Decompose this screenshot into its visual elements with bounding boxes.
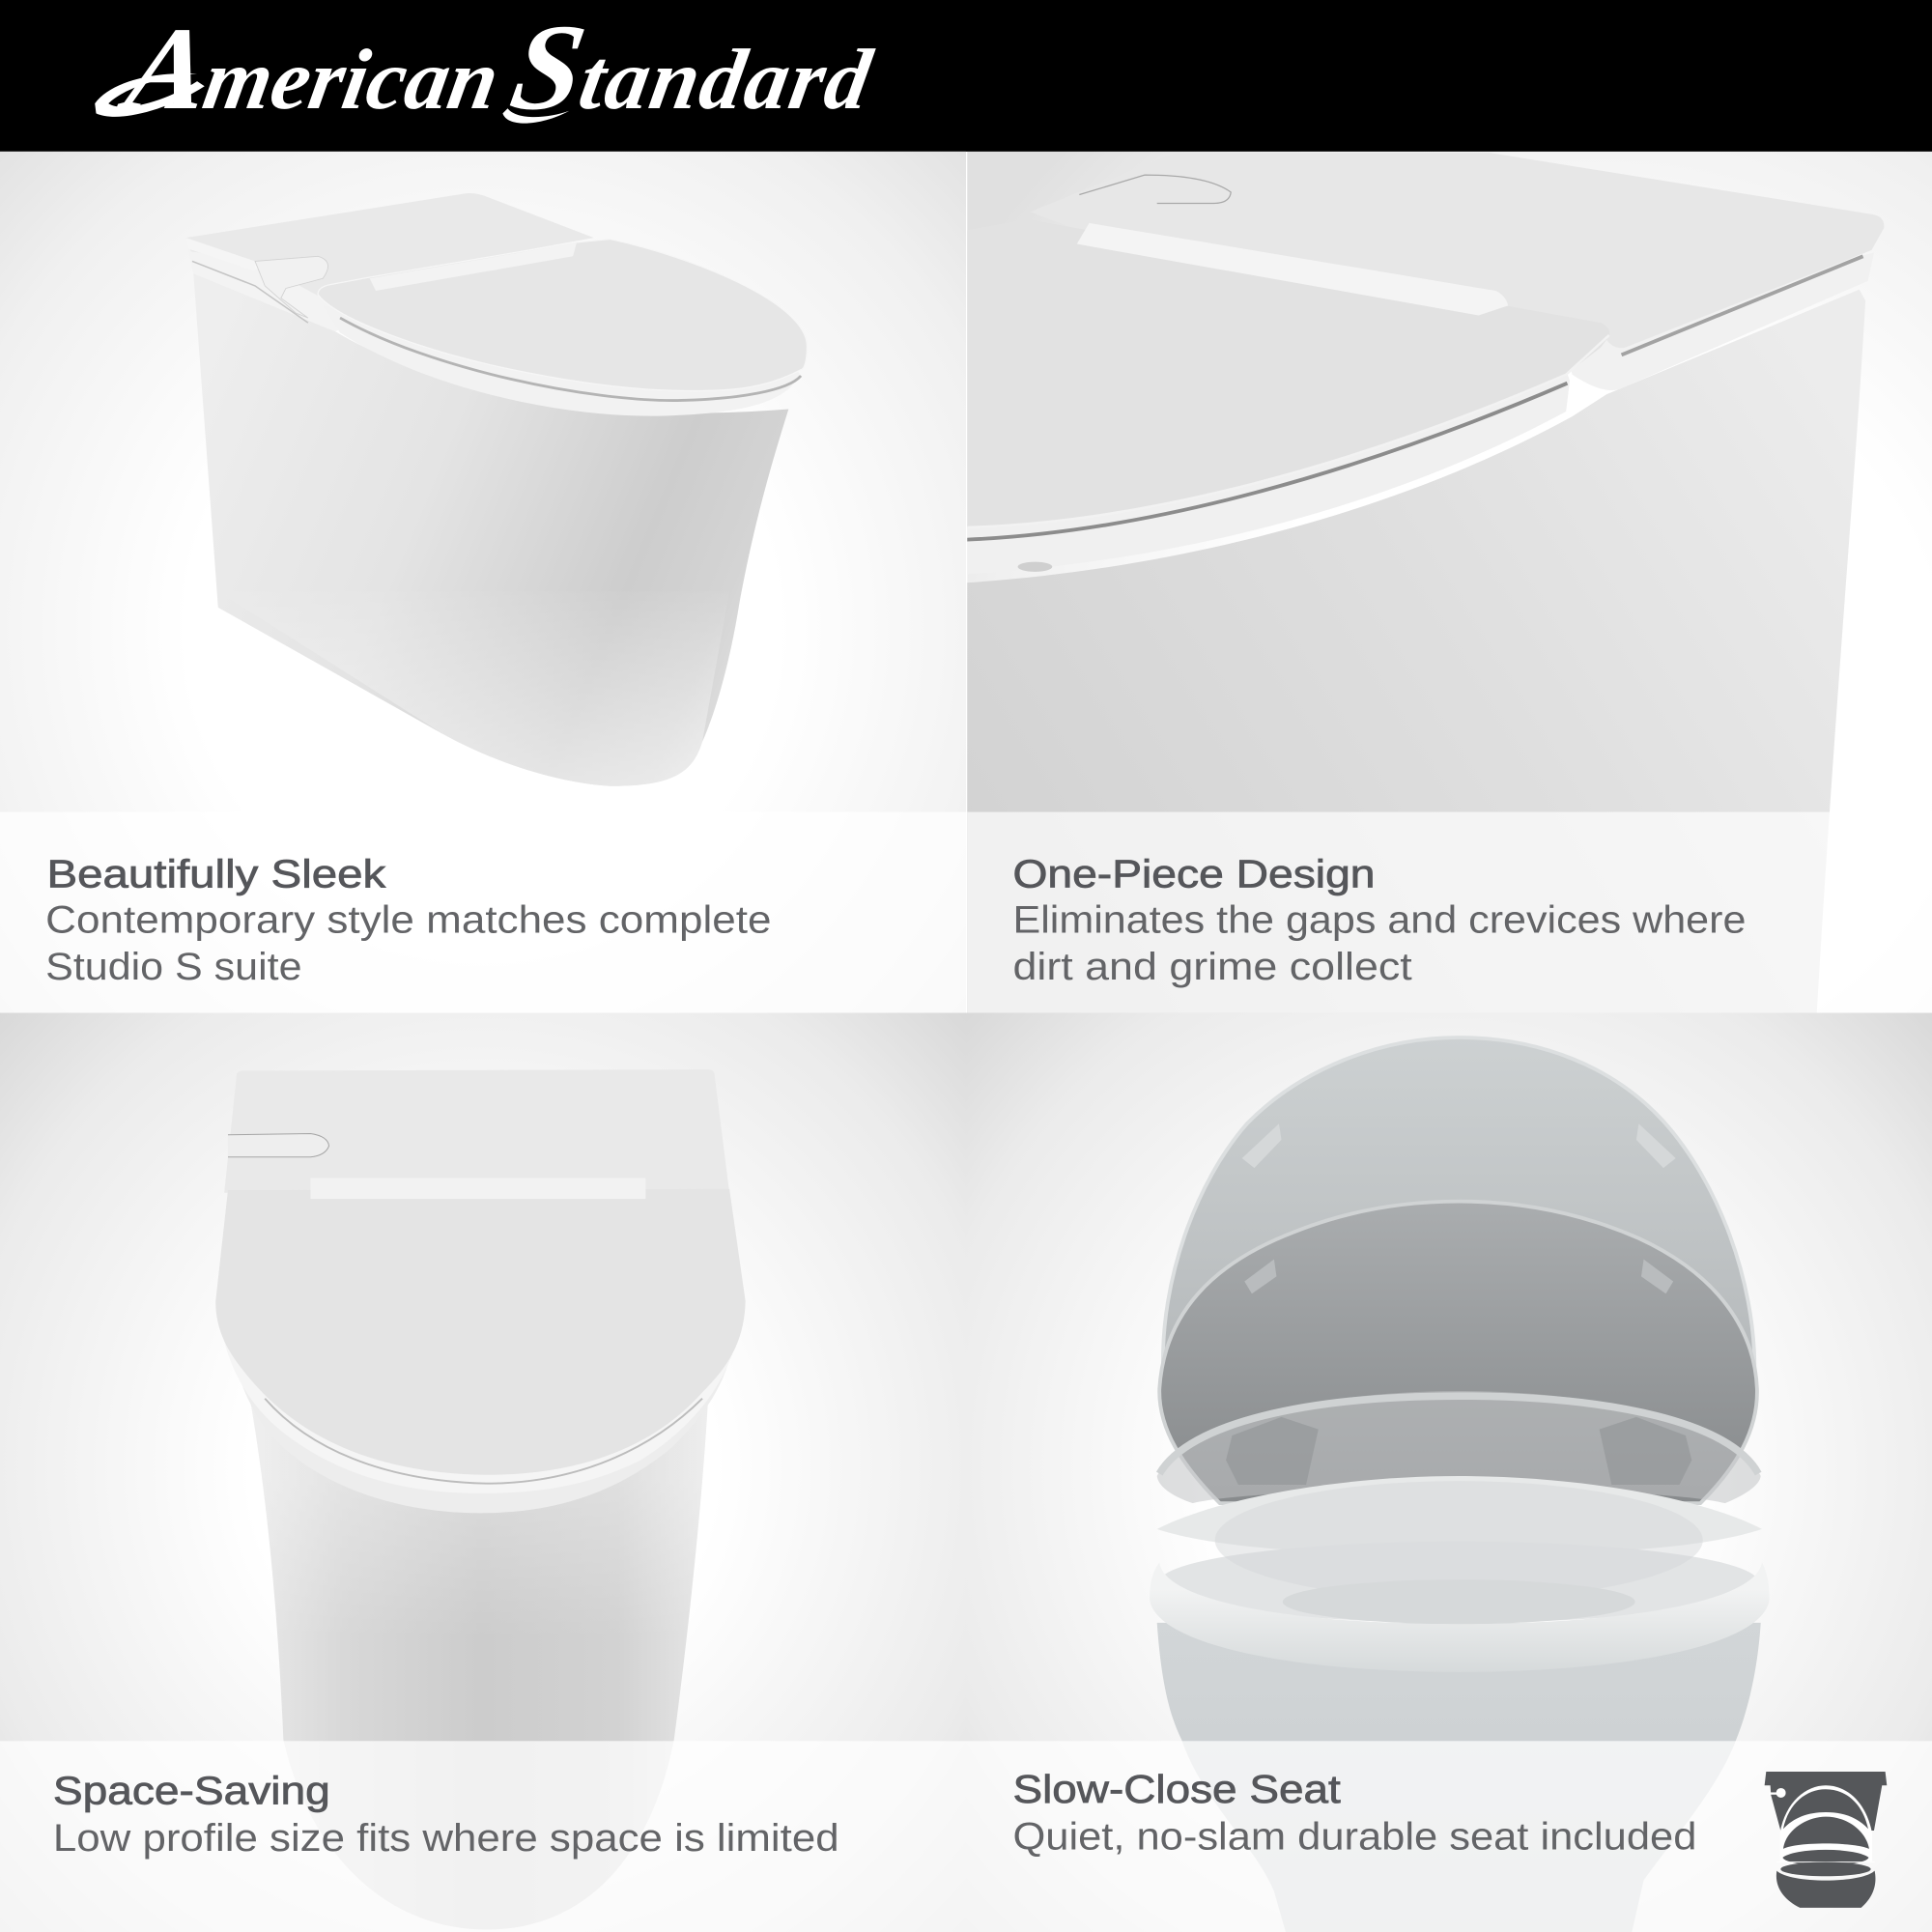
toilet with seat motion xyxy=(1150,1037,1770,1932)
lowering lid xyxy=(1157,1391,1761,1503)
seat xyxy=(1165,1549,1754,1621)
bowl xyxy=(1157,1623,1761,1932)
caption text: Low profile size fits where space is limited xyxy=(53,1817,839,1860)
panel: Slow-Close Seat xyxy=(966,1012,1932,1932)
hinge bar xyxy=(310,1178,645,1199)
caption overlay xyxy=(966,1741,1932,1932)
caption overlay xyxy=(968,811,1830,1012)
seat lower layer xyxy=(1155,375,1570,551)
rim xyxy=(1150,1562,1770,1672)
caption text: Studio S suite xyxy=(45,946,301,988)
hinge bar xyxy=(1077,223,1508,316)
open lid xyxy=(1163,1037,1754,1368)
panel: Space-Saving xyxy=(0,1012,966,1932)
icon: slow-close toilet seat xyxy=(1765,1772,1887,1908)
header band with logo xyxy=(0,0,1932,152)
tank lid xyxy=(1179,153,1884,348)
translucent seat overlap xyxy=(1215,1482,1702,1557)
panel: Beautifully Sleek xyxy=(0,152,966,1012)
caption text: Quiet, no-slam durable seat included xyxy=(1012,1816,1696,1859)
caption text: dirt and grime collect xyxy=(1012,946,1412,988)
caption overlay xyxy=(0,1741,966,1932)
caption text xyxy=(1012,851,1746,988)
toilet top view xyxy=(215,1069,746,1929)
seat lid xyxy=(967,249,1605,526)
seat lid xyxy=(318,239,807,391)
flush button xyxy=(228,1133,329,1157)
lowering lid ribs xyxy=(1226,1417,1691,1485)
logo: American Standard: S xyxy=(502,0,595,135)
tank lid xyxy=(186,193,594,296)
seat opening xyxy=(1283,1588,1634,1623)
caption text: Beautifully Sleek xyxy=(46,851,386,895)
caption text: One-Piece Design xyxy=(1012,851,1375,895)
seat bumper xyxy=(1018,562,1052,572)
caption overlay xyxy=(0,812,966,1012)
logo: American Standard: merican xyxy=(197,33,506,128)
caption text: Slow-Close Seat xyxy=(1012,1767,1341,1811)
tank lower layer xyxy=(1571,282,1824,390)
logo: American Standard xyxy=(95,0,886,135)
logo: American Standard: A xyxy=(111,3,220,134)
lid tabs xyxy=(1242,1123,1676,1168)
raised seat xyxy=(1157,1476,1762,1555)
toilet close-up xyxy=(966,153,1884,1023)
middle lid xyxy=(1159,1202,1757,1503)
flush button xyxy=(1079,175,1231,203)
seat lid xyxy=(215,1189,746,1475)
caption text xyxy=(53,1768,839,1860)
panel: One-Piece Design xyxy=(966,152,1932,1023)
caption text xyxy=(45,851,771,988)
caption text: Contemporary style matches complete xyxy=(45,899,771,942)
caption text: Space-Saving xyxy=(53,1768,330,1812)
toilet side view xyxy=(186,193,807,786)
tank lid xyxy=(224,1069,729,1193)
middle lid tabs xyxy=(1244,1260,1673,1293)
caption text: Eliminates the gaps and crevices where xyxy=(1012,899,1746,942)
caption text xyxy=(1012,1767,1696,1859)
logo: American Standard: tandard xyxy=(573,33,880,128)
